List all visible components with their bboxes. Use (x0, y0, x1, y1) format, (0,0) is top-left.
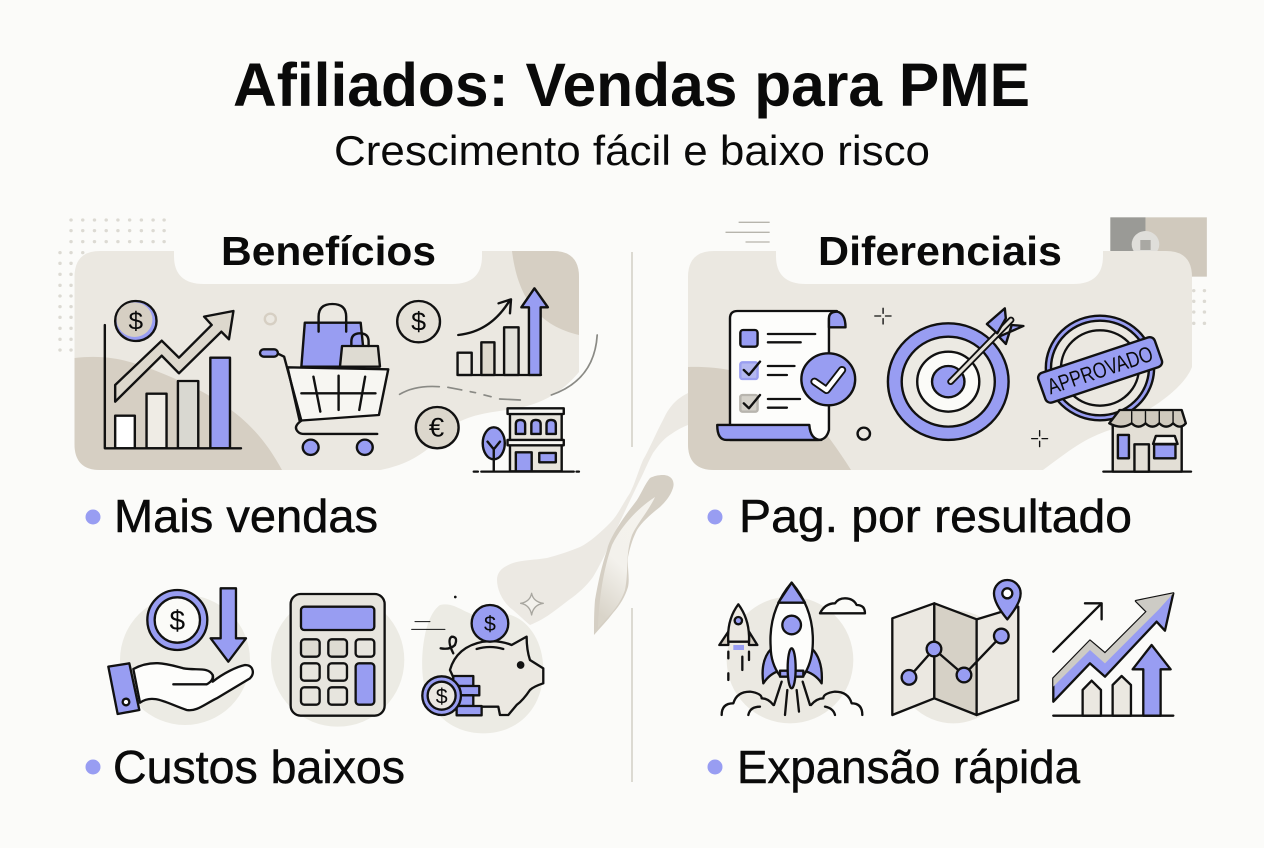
icon: sparkle (1032, 431, 1048, 447)
icon: checklist document (717, 311, 855, 440)
icon: approved stamp: APPROVADO (1044, 341, 1156, 399)
icon: dollar coin (397, 301, 440, 342)
icon: hand receiving coin (108, 588, 253, 725)
icons: fast expansion row (719, 580, 1173, 723)
icon: sparkle (875, 308, 891, 324)
icon: calculator (271, 593, 404, 727)
icon: dollar coin: $ (411, 307, 426, 337)
icons: low costs row (108, 588, 543, 733)
icon: small growth chart (458, 288, 548, 375)
heading: Diferenciais: Diferenciais (818, 228, 1062, 274)
icon: growth chart arrow (1053, 593, 1173, 716)
icon: storefront (1103, 410, 1191, 472)
icon: rockets (719, 583, 865, 723)
icon: shopping cart with bags (260, 304, 388, 455)
center divider (631, 252, 633, 782)
bullet: Mais vendas: Mais vendas (114, 490, 378, 542)
icon: piggy bank with coins (412, 593, 543, 733)
icon: euro coin: € (429, 412, 444, 443)
icon: target with arrow (888, 308, 1023, 440)
icon: hand receiving coin: $ (170, 605, 186, 636)
icon: approved stamp (1037, 316, 1164, 420)
subtitle: Crescimento fácil e baixo risco (334, 127, 930, 174)
bullet: Expansão rápida: Expansão rápida (737, 741, 1080, 793)
heading: Benefícios: Benefícios (221, 228, 436, 274)
icons: differentials (717, 308, 1191, 472)
icon: bar chart with rising arrow: $ (129, 308, 143, 336)
icon: decorative ring (265, 314, 276, 324)
icon: building with tree (474, 408, 579, 472)
panel: differentials decorations (726, 217, 1207, 325)
panel: Benefícios (74, 251, 579, 470)
panel: benefits decorations (58, 218, 166, 352)
icon: piggy bank with coins: $ (436, 684, 448, 708)
icons: benefits (105, 288, 597, 472)
icon: piggy bank with coins: $ (484, 612, 496, 636)
icon: euro coin (416, 407, 459, 448)
icon: small ring (858, 428, 870, 440)
icon: bar chart with rising arrow (105, 301, 241, 448)
decorative flowing swoosh (497, 393, 688, 635)
icon: map with route (892, 580, 1021, 723)
dashed route (400, 335, 597, 400)
panel: Diferenciais (688, 251, 1192, 470)
bullet: Custos baixos: Custos baixos (113, 741, 405, 793)
title: Afiliados: Vendas para PME (233, 51, 1030, 119)
bullet: Pag. por resultado: Pag. por resultado (739, 490, 1132, 542)
